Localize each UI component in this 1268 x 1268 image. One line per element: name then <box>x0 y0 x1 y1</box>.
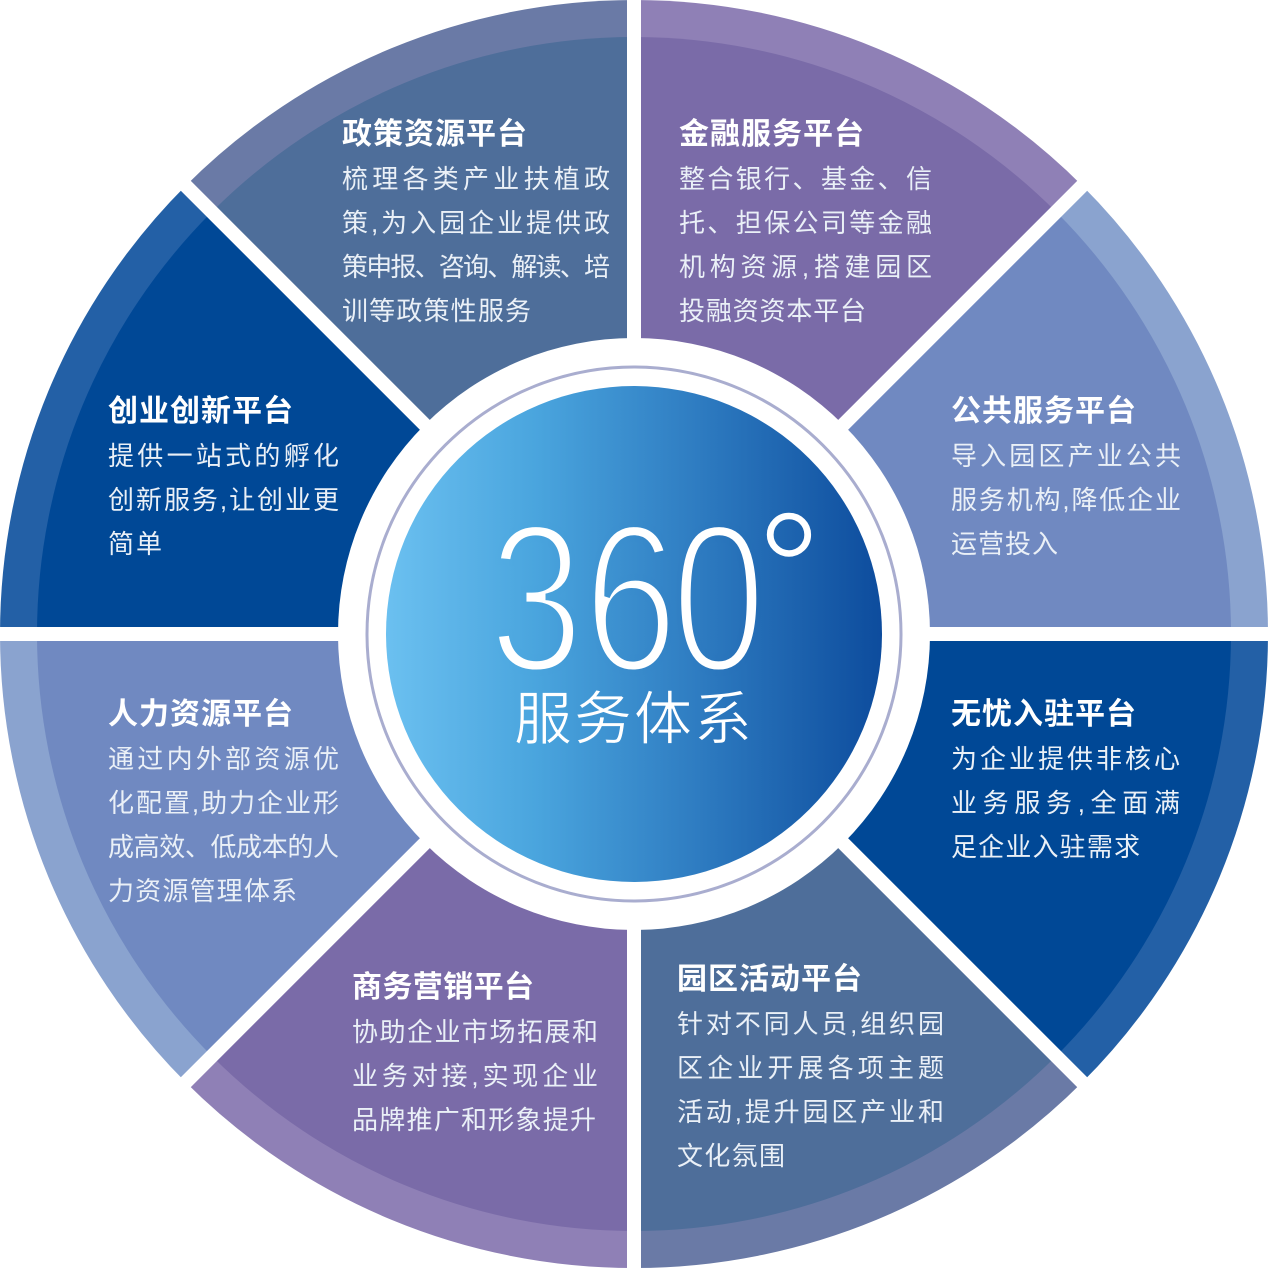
panel: 政策资源平台: 梳理各类产业扶植政 <box>342 164 610 194</box>
panel: 政策资源平台: 策,为入园企业提供政 <box>342 208 610 238</box>
panel: 公共服务平台: 公共服务平台 <box>951 394 1136 428</box>
panel: 园区活动平台: 活动,提升园区产业和 <box>677 1097 944 1127</box>
panel: 公共服务平台: 导入园区产业公共 <box>951 441 1181 471</box>
panel: 商务营销平台: 协助企业市场拓展和 <box>352 1017 598 1047</box>
panel: 创业创新平台: 创新服务,让创业更 <box>108 485 339 515</box>
panel: 公共服务平台: 运营投入 <box>951 529 1058 559</box>
panel: 创业创新平台: 提供一站式的孵化 <box>108 441 339 471</box>
center hub: 360° 服务体系 <box>338 338 930 930</box>
degree sign: ° <box>756 478 822 662</box>
panel: 人力资源平台: 化配置,助力企业形 <box>108 788 339 818</box>
panel: 商务营销平台: 品牌推广和形象提升 <box>352 1105 596 1135</box>
panel: 金融服务平台: 整合银行、基金、信 <box>679 164 932 194</box>
panel: 无忧入驻平台 <box>634 634 1268 1082</box>
panel: 政策资源平台 <box>186 0 634 634</box>
panel: 金融服务平台: 投融资资本平台 <box>679 296 866 326</box>
big number 360: 360 <box>489 481 766 716</box>
panel: 金融服务平台 <box>634 0 1082 634</box>
panel: 人力资源平台: 成高效、低成本的人 <box>108 832 339 862</box>
subtitle: 服务体系 <box>514 687 752 752</box>
panel: 政策资源平台: 政策资源平台 <box>342 117 527 151</box>
panel: 园区活动平台: 区企业开展各项主题 <box>677 1053 944 1083</box>
panel: 园区活动平台: 针对不同人员,组织园 <box>677 1009 944 1039</box>
panel: 金融服务平台: 金融服务平台 <box>679 117 864 151</box>
panel: 无忧入驻平台: 无忧入驻平台 <box>951 697 1136 731</box>
panel: 人力资源平台: 人力资源平台 <box>108 697 293 731</box>
panel: 园区活动平台 <box>634 634 1082 1268</box>
panel: 人力资源平台: 力资源管理体系 <box>108 876 297 906</box>
panel: 无忧入驻平台: 足企业入驻需求 <box>951 832 1140 862</box>
panel: 创业创新平台: 简单 <box>108 529 162 559</box>
panel: 人力资源平台 <box>0 634 634 1082</box>
panel: 人力资源平台: 通过内外部资源优 <box>108 744 339 774</box>
panel: 商务营销平台: 业务对接,实现企业 <box>352 1061 598 1091</box>
panel: 商务营销平台 <box>186 634 634 1268</box>
panel: 无忧入驻平台: 业务服务,全面满 <box>951 788 1180 818</box>
panel: 政策资源平台: 训等政策性服务 <box>342 296 531 326</box>
panel: 政策资源平台: 策申报、咨询、解读、培 <box>342 252 610 282</box>
panel: 金融服务平台: 托、担保公司等金融 <box>679 208 932 238</box>
panel: 金融服务平台: 机构资源,搭建园区 <box>679 252 932 282</box>
panel: 创业创新平台 <box>0 186 634 634</box>
panel: 园区活动平台: 文化氛围 <box>677 1141 785 1171</box>
panel: 园区活动平台: 园区活动平台 <box>677 962 862 996</box>
panel: 无忧入驻平台: 为企业提供非核心 <box>951 744 1180 774</box>
panel: 创业创新平台: 创业创新平台 <box>108 394 293 428</box>
panel: 公共服务平台: 服务机构,降低企业 <box>951 485 1181 515</box>
panel: 商务营销平台: 商务营销平台 <box>352 970 534 1004</box>
panel: 公共服务平台 <box>634 186 1268 634</box>
